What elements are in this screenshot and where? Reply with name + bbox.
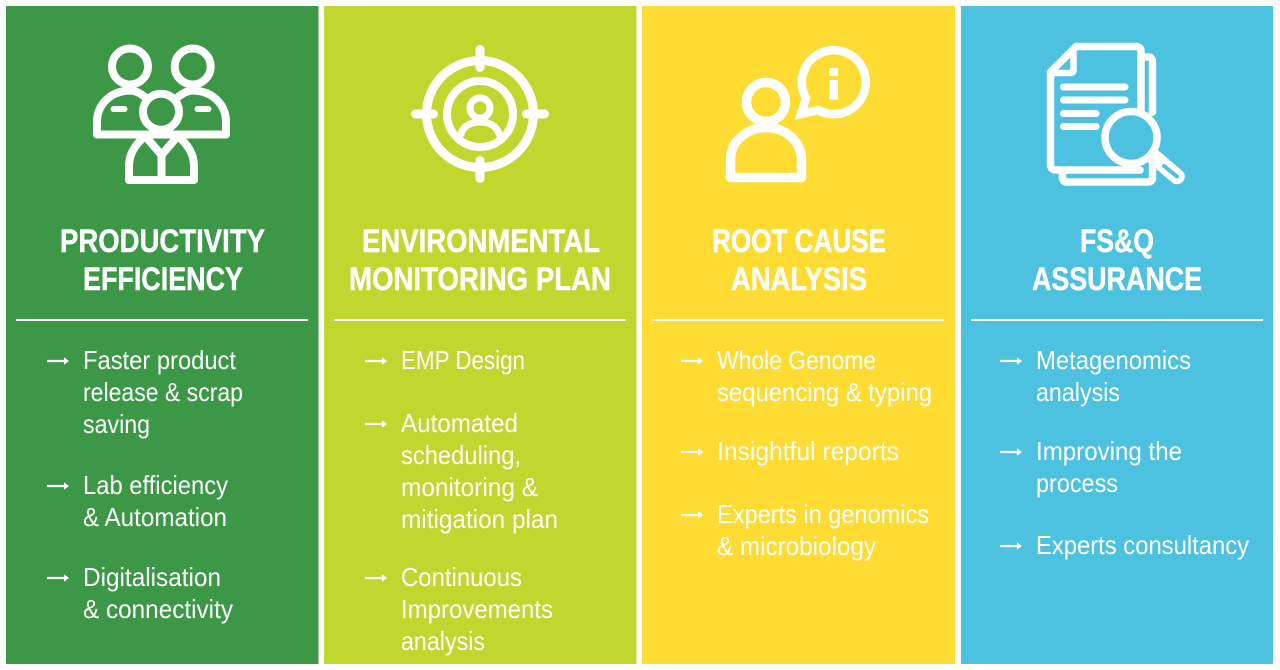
list item: continuous improvements: analysis — [401, 626, 485, 656]
heading: FS&Q assurance: FS&Q — [1080, 223, 1154, 259]
heading: root cause analysis — [712, 223, 886, 297]
list item: improving the process: Improving the — [1036, 436, 1182, 466]
list item: automated scheduling: monitoring & — [401, 472, 538, 502]
list item: faster product release — [47, 345, 243, 439]
list item: experts in genomics — [681, 499, 929, 561]
list item: improving the process — [1000, 436, 1182, 498]
list item: faster product release: Faster product — [83, 345, 237, 375]
icon: target with person — [416, 50, 544, 178]
list item: whole genome sequencing — [681, 345, 932, 407]
list item: metagenomics analysis: Metagenomics — [1036, 345, 1191, 375]
heading: productivity efficiency — [60, 223, 265, 297]
icon: person with info speech bubble — [730, 50, 866, 178]
list item: faster product release: saving — [83, 409, 150, 439]
heading: root cause analysis: ROOT CAUSE — [712, 223, 886, 259]
list item: experts in genomics: Experts in genomics — [717, 499, 929, 529]
list item: lab efficiency: Lab efficiency — [83, 470, 228, 500]
list item: insightful reports: Insightful reports — [717, 436, 899, 466]
heading: environmental monitoring plan: ENVIRONMENTAL — [362, 223, 600, 259]
list item: automated scheduling — [365, 408, 558, 534]
list item: EMP design: EMP Design — [401, 345, 525, 375]
list item: metagenomics analysis: analysis — [1036, 377, 1120, 407]
heading: FS&Q assurance — [1032, 223, 1202, 297]
icon: group of three people — [97, 48, 226, 180]
list item: metagenomics analysis — [1000, 345, 1191, 407]
list item: improving the process: process — [1036, 468, 1118, 498]
list item: digitalisation: & connectivity — [83, 594, 233, 624]
list item: continuous improvements — [365, 562, 553, 656]
list item: experts consultancy: Experts consultancy — [1036, 530, 1249, 560]
list item: continuous improvements: Continuous — [401, 562, 522, 592]
list item: whole genome sequencing: Whole Genome — [717, 345, 876, 375]
heading: FS&Q assurance: ASSURANCE — [1032, 261, 1202, 297]
icon: documents with magnifying glass — [1050, 46, 1177, 182]
list item: automated scheduling: Automated — [401, 408, 518, 438]
list item: digitalisation: Digitalisation — [83, 562, 221, 592]
panel: productivity efficiency — [6, 6, 318, 664]
panel: FS&Q assurance — [961, 6, 1273, 664]
heading: environmental monitoring plan — [349, 223, 611, 297]
heading: environmental monitoring plan: MONITORING PLAN — [349, 261, 611, 297]
panel: root cause analysis — [642, 6, 955, 664]
heading: root cause analysis: ANALYSIS — [731, 261, 867, 297]
list item: experts in genomics: & microbiology — [717, 531, 876, 561]
list item: digitalisation — [47, 562, 233, 624]
list item: automated scheduling: mitigation plan — [401, 504, 558, 534]
list item: lab efficiency — [47, 470, 228, 532]
heading: productivity efficiency: PRODUCTIVITY — [60, 223, 265, 259]
list item: faster product release: release & scrap — [83, 377, 243, 407]
list item: automated scheduling: scheduling, — [401, 440, 521, 470]
list item: whole genome sequencing: sequencing & typing — [717, 377, 932, 407]
heading: productivity efficiency: EFFICIENCY — [83, 261, 243, 297]
panel: environmental monitoring plan — [324, 6, 636, 664]
list item: lab efficiency: & Automation — [83, 502, 227, 532]
list item: continuous improvements: Improvements — [401, 594, 553, 624]
list item: EMP design — [365, 345, 525, 375]
